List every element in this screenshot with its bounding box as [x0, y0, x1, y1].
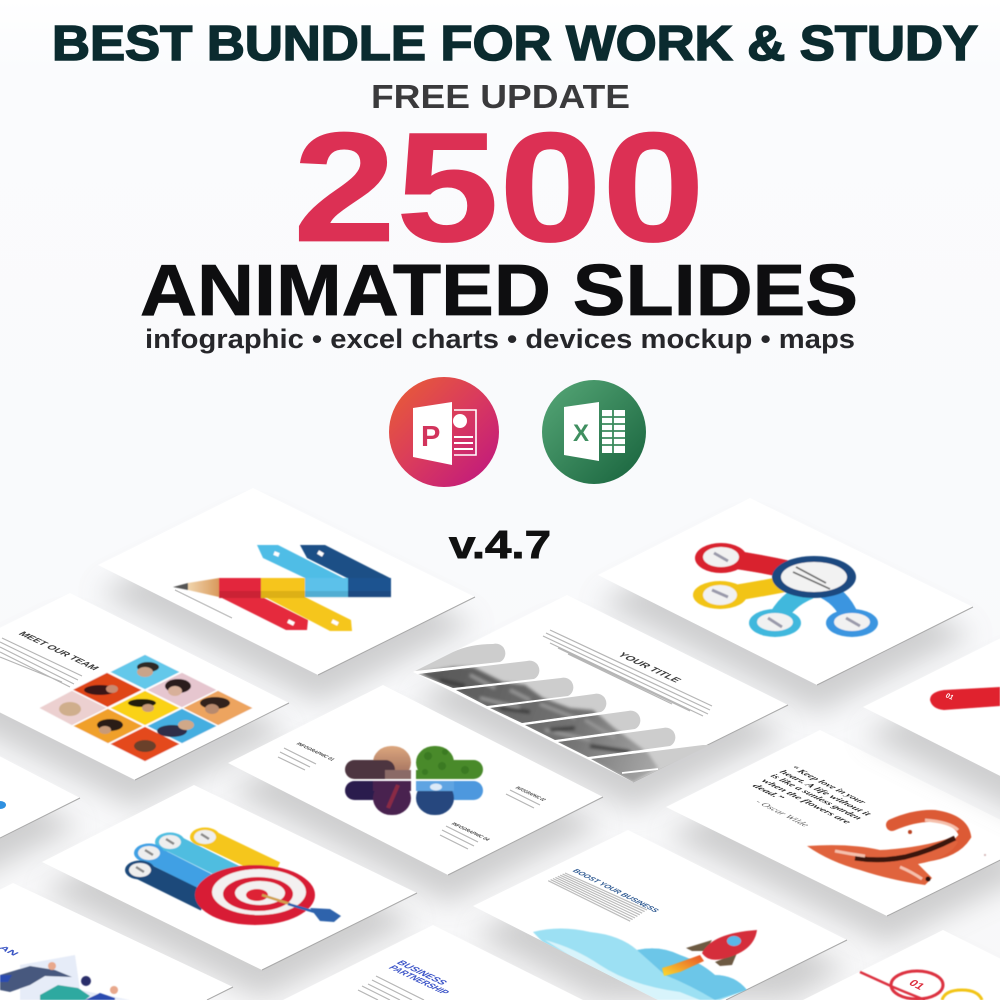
slide: metaball diagram [598, 498, 973, 713]
icon: excel [542, 380, 646, 484]
icon: powerpoint: P [421, 421, 440, 453]
slide heading: YOUR TITLE [614, 651, 684, 684]
label bottom right: INFOGRAPHIC 04 [449, 822, 491, 842]
label bottom right [440, 822, 491, 849]
timeline [860, 971, 982, 1000]
slide: target [42, 785, 417, 998]
blue shape [0, 801, 6, 809]
label top right: INFOGRAPHIC 02 [513, 786, 547, 802]
slide: people bottom left [0, 883, 233, 1000]
slide: timeline bottom right [803, 930, 1000, 1000]
slide heading: BUSINESS [393, 959, 449, 987]
slide body text [543, 630, 712, 716]
slide: flower [228, 685, 603, 903]
heading: free update: FREE UPDATE [371, 78, 630, 115]
label top right [506, 786, 547, 808]
quote text [750, 765, 874, 825]
slide: rocket [473, 830, 847, 1000]
slide: meet our team [0, 593, 289, 808]
people illustration [0, 955, 130, 1000]
slide heading: BOOST YOUR BUSINESS [570, 868, 661, 913]
team photo grid [38, 654, 254, 762]
slide body text [358, 976, 424, 1000]
icon: excel: X [573, 420, 589, 447]
slide body text [0, 638, 82, 687]
slide: pencil [98, 488, 475, 703]
quote text: when the flowers are [759, 778, 854, 825]
clouds [533, 928, 747, 1000]
quote text: heart. A life without it [777, 769, 874, 817]
rocket [662, 930, 757, 976]
title: BEST BUNDLE FOR WORK & STUDY [52, 17, 978, 71]
pencil infographic [173, 545, 391, 631]
heading: 2500: 2500 [293, 101, 705, 275]
label top left [278, 742, 336, 770]
slide: red pill right [863, 630, 1000, 845]
quote attribution: - Oscar Wilde [753, 799, 812, 828]
metaball infographic [693, 543, 878, 637]
red pill [930, 687, 1000, 710]
pill number: 01 [944, 693, 955, 702]
slide body text [548, 873, 647, 921]
slide heading: MEET OUR TEAM [15, 630, 101, 672]
quote text: dead.” [750, 783, 787, 801]
quote text: “ Keep love in your [788, 765, 869, 805]
label top left: INFOGRAPHIC 01 [294, 742, 336, 762]
step number: 01 [906, 978, 927, 992]
slide: quote [666, 730, 1000, 944]
quote text: is like a sunless garden [768, 773, 865, 821]
slide: business partnership [283, 925, 583, 1000]
painted number 2 [807, 816, 986, 885]
mountain photo strips [415, 644, 710, 782]
version label: v.4.7 [449, 524, 551, 567]
target infographic [125, 828, 341, 925]
slide: your title [413, 595, 788, 810]
slide heading: PARTNERSHIP [385, 964, 451, 996]
icon: powerpoint [389, 377, 499, 487]
subtitle: infographic • excel charts • devices mockup • maps [145, 324, 855, 354]
heading: animated slides: ANIMATED SLIDES [140, 251, 858, 331]
flower photo infographic [345, 746, 483, 815]
slide: left edge fragment [0, 720, 80, 903]
